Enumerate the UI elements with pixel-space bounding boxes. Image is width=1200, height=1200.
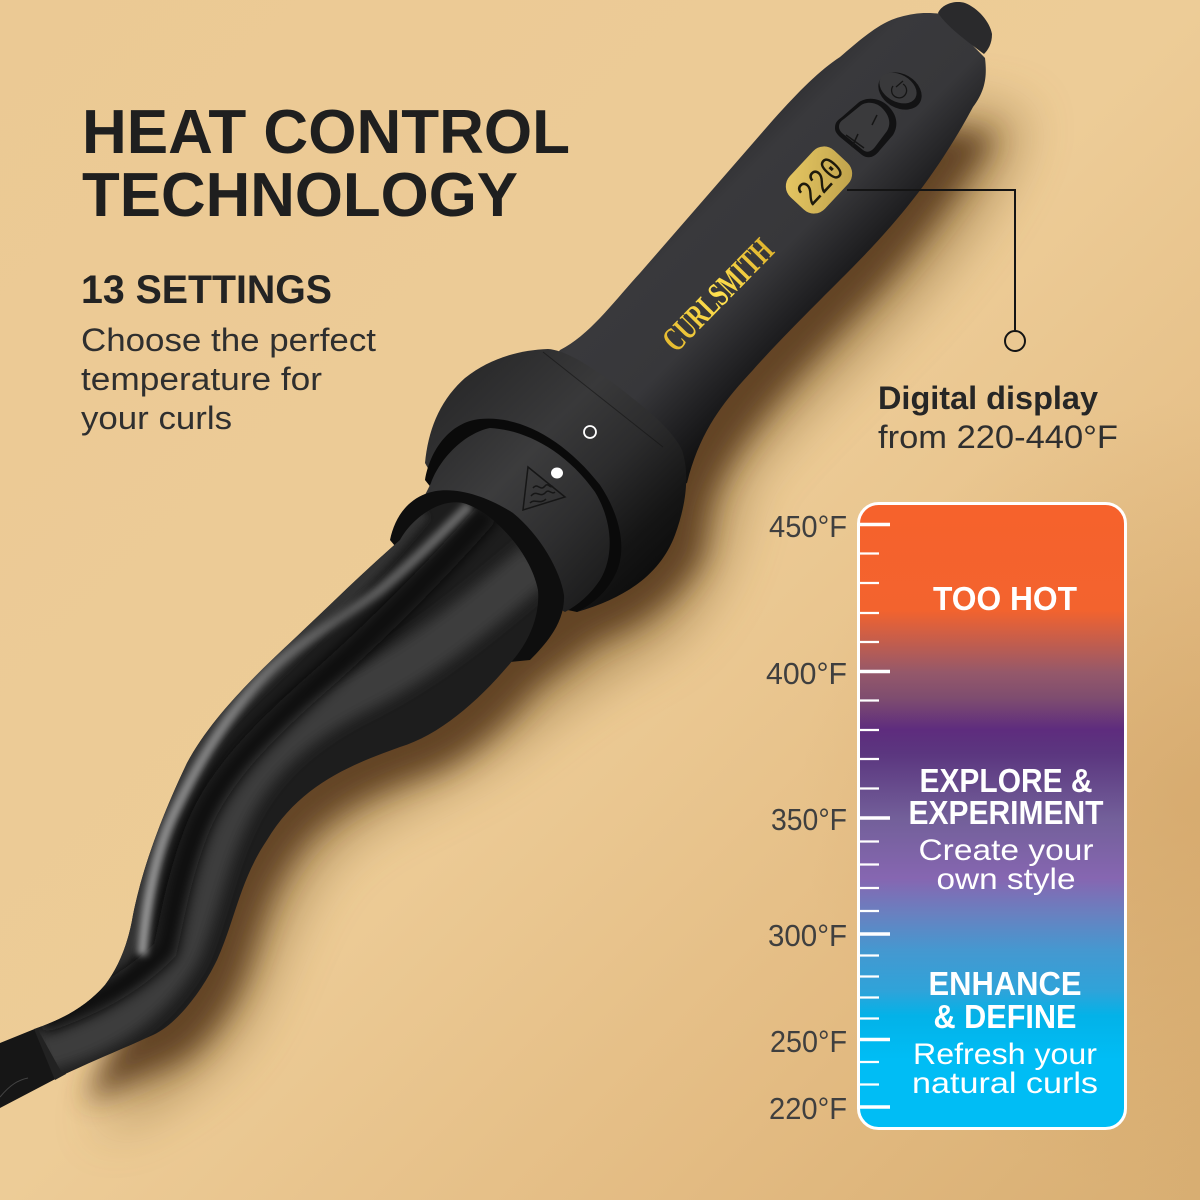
front ring — [390, 490, 564, 662]
enhance and define label: natural curls — [912, 1067, 1098, 1100]
gradient bar — [858, 504, 1126, 1128]
indicator ring — [584, 426, 596, 438]
enhance and define label: & DEFINE — [934, 998, 1076, 1035]
digital display caption: from 220-440°F — [878, 419, 1118, 455]
temperature axis labels: 350°F — [771, 802, 847, 837]
digital display caption: Digital display — [878, 380, 1098, 416]
major ticks — [859, 524, 890, 1107]
explore and experiment label: EXPERIMENT — [908, 794, 1104, 831]
minor ticks — [859, 554, 879, 1084]
handle and head — [425, 2, 992, 612]
too hot label: TOO HOT — [933, 580, 1077, 617]
temperature scale panel — [858, 504, 1126, 1128]
barrel upper rim — [40, 510, 420, 1025]
cast shadow — [85, 105, 1025, 1135]
explore and experiment label: own style — [936, 863, 1076, 896]
settings heading: 13 SETTINGS — [81, 268, 332, 312]
enhance and define label — [912, 965, 1098, 1100]
temperature axis labels: 450°F — [769, 509, 847, 544]
plus minus button — [835, 99, 896, 157]
temperature axis labels: 400°F — [766, 656, 847, 691]
temperature axis labels: 250°F — [770, 1024, 847, 1059]
explore and experiment label — [908, 762, 1104, 896]
explore and experiment label: Create your — [918, 834, 1094, 867]
cord — [0, 1026, 66, 1108]
temperature axis labels: 300°F — [768, 918, 847, 953]
enhance and define label: ENHANCE — [928, 965, 1082, 1002]
settings description: your curls — [81, 400, 232, 436]
temperature axis labels — [766, 509, 847, 1126]
handle body — [520, 13, 986, 520]
collar recess — [425, 419, 621, 612]
digital display: 220 — [790, 150, 854, 215]
title: HEAT CONTROL — [82, 98, 570, 167]
end cap — [938, 2, 992, 54]
enhance and define label: Refresh your — [913, 1038, 1097, 1071]
callout leader line — [847, 190, 1025, 351]
digital display caption — [878, 380, 1118, 455]
head — [425, 349, 686, 612]
barrel centre sheen — [40, 560, 540, 1050]
indicator dot — [551, 468, 563, 478]
title — [82, 98, 570, 230]
collar — [415, 419, 621, 612]
barrel dark band — [40, 510, 490, 1022]
settings description: Choose the perfect — [81, 322, 376, 358]
title: TECHNOLOGY — [82, 161, 518, 230]
power button — [872, 65, 928, 117]
barrel highlight — [142, 505, 470, 955]
barrel — [37, 502, 538, 1074]
heat triangle icon — [523, 467, 565, 510]
temperature axis labels: 220°F — [769, 1091, 847, 1126]
settings description: temperature for — [81, 361, 322, 397]
collar cylinder — [415, 428, 610, 612]
brand name: CURLSMITH — [655, 232, 781, 359]
settings description — [81, 322, 376, 436]
explore and experiment label: EXPLORE & — [920, 762, 1092, 799]
